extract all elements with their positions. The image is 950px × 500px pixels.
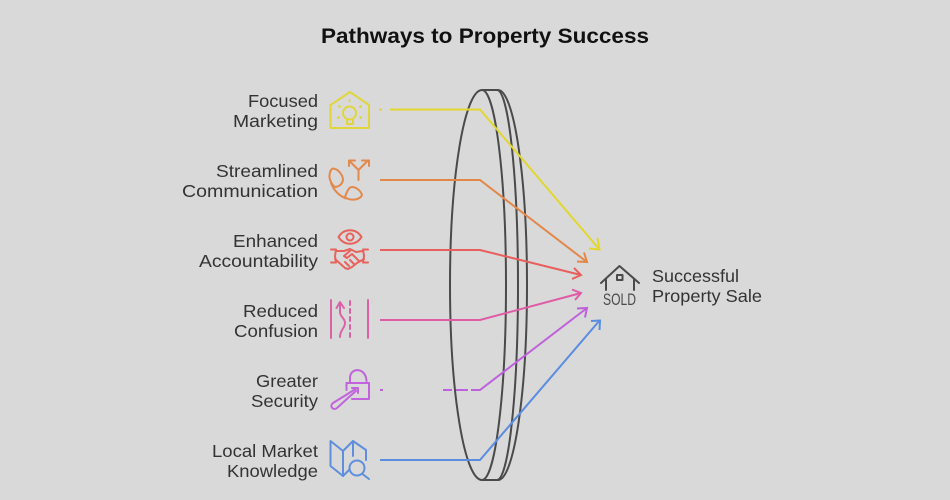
label: Streamlined Communication: [182, 161, 318, 201]
icon: sold house: SOLD: [603, 291, 636, 309]
label: Enhanced Accountability: [199, 231, 318, 271]
label: Greater Security: Greater: [256, 371, 318, 391]
label: Successful Property Sale: [652, 266, 762, 306]
arrow: yellow: [379, 110, 600, 250]
icon: road with curved arrow: [331, 300, 368, 338]
arrow: purple: [380, 308, 587, 390]
label: Local Market Knowledge: Knowledge: [227, 461, 318, 481]
label: Reduced Confusion: Confusion: [234, 321, 318, 341]
label: Streamlined Communication: Streamlined: [216, 161, 318, 181]
label: Local Market Knowledge: [212, 441, 318, 481]
label: Successful Property Sale: Property Sale: [652, 286, 762, 306]
arrow: orange: [380, 180, 587, 262]
label: Focused Marketing: [233, 91, 318, 131]
icon: map with magnifier: [330, 441, 369, 479]
label: Enhanced Accountability: Enhanced: [233, 231, 318, 251]
lens shape: [450, 90, 527, 480]
title: Pathways to Property Success: [321, 24, 649, 48]
label: Focused Marketing: Focused: [248, 91, 318, 111]
label: Successful Property Sale: Successful: [652, 266, 739, 286]
label: Enhanced Accountability: Accountability: [199, 251, 318, 271]
label: Reduced Confusion: Reduced: [243, 301, 318, 321]
label: Local Market Knowledge: Local Market: [212, 441, 318, 461]
arrow: pink: [380, 290, 581, 320]
icon: eye and handshake: [331, 230, 368, 269]
label: Focused Marketing: Marketing: [233, 111, 318, 131]
icon: phone with arrows: [329, 160, 369, 200]
label: Greater Security: Security: [251, 391, 318, 411]
arrow: red: [380, 250, 581, 279]
label: Greater Security: [251, 371, 318, 411]
icon: house with light bulb: [330, 92, 369, 128]
icon: unlocked padlock with key: [331, 370, 369, 409]
label: Streamlined Communication: Communication: [182, 181, 318, 201]
icon: sold house: [601, 266, 639, 309]
arrow: blue: [380, 320, 600, 460]
label: Reduced Confusion: [234, 301, 318, 341]
